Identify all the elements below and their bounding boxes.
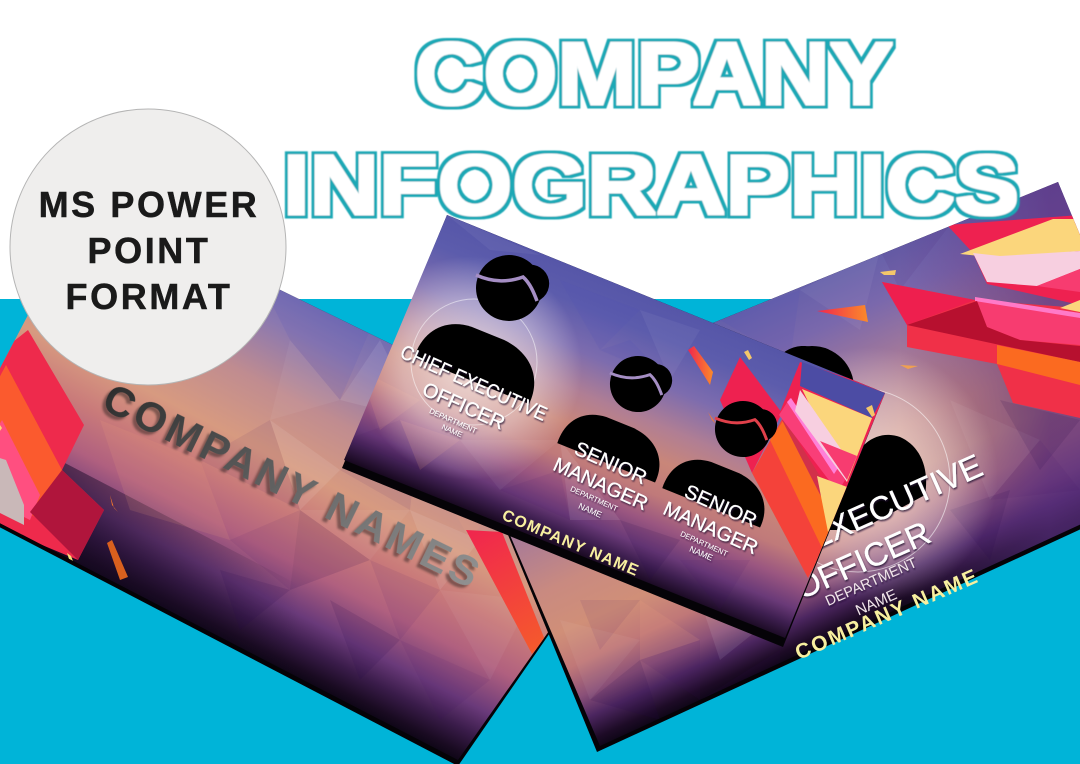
text: chief executive officer label: DEPARTMENT — [428, 406, 479, 435]
panel: centre slide, org chart — [335, 210, 895, 655]
big red layered shapes — [882, 215, 1080, 418]
figure: right slide person — [770, 346, 926, 530]
text: chief executive officer label: NAME — [440, 422, 464, 439]
panel: left slide, company names — [0, 290, 549, 764]
glow behind chief — [370, 262, 575, 475]
orange slivers — [107, 540, 128, 580]
figure: senior manager two — [662, 383, 802, 528]
text: company name, centre slide: COMPANY NAME — [499, 507, 641, 580]
left stacked red shapes — [0, 330, 104, 560]
badge: ms power point format: POINT — [87, 230, 211, 271]
text: company name, right slide: COMPANY NAME — [792, 565, 981, 665]
title: company infographics — [283, 24, 1019, 232]
title: company infographics: COMPANY — [415, 24, 893, 123]
text: chief executive officer label: OFFICER — [419, 379, 508, 434]
text: senior manager two label: NAME — [688, 544, 715, 563]
red layered decoration — [720, 357, 890, 578]
badge: ms power point format — [10, 109, 286, 385]
badge: ms power point format: FORMAT — [66, 276, 232, 317]
text: senior manager two label: SENIOR — [681, 481, 760, 532]
text: chief executive officer: DEPARTMENT — [823, 555, 920, 610]
text: senior manager one label: NAME — [577, 501, 604, 520]
figure: senior manager one — [557, 338, 697, 483]
text: senior manager one label: DEPARTMENT — [569, 484, 620, 513]
text: senior manager one label: MANAGER — [550, 454, 651, 515]
slide title: company names: COMPANY NAMES — [96, 374, 487, 597]
title: company infographics: INFOGRAPHICS — [283, 138, 1019, 232]
figure: chief executive officer — [414, 234, 579, 404]
text: chief executive officer: CHIEF EXECUTIVE — [703, 447, 988, 600]
text: senior manager two label: DEPARTMENT — [679, 529, 730, 558]
text: chief executive officer: OFFICER — [788, 514, 936, 606]
panel: right slide, chief executive officer — [508, 182, 1080, 752]
text: senior manager two label: MANAGER — [660, 498, 761, 559]
text: senior manager one label: SENIOR — [571, 438, 650, 489]
text: chief executive officer label: CHIEF EXECUTIVE — [397, 341, 550, 426]
badge: ms power point format: MS POWER — [39, 184, 259, 225]
text: chief executive officer: NAME — [853, 586, 900, 619]
glow behind figure — [811, 357, 990, 597]
right red strip — [466, 530, 545, 654]
